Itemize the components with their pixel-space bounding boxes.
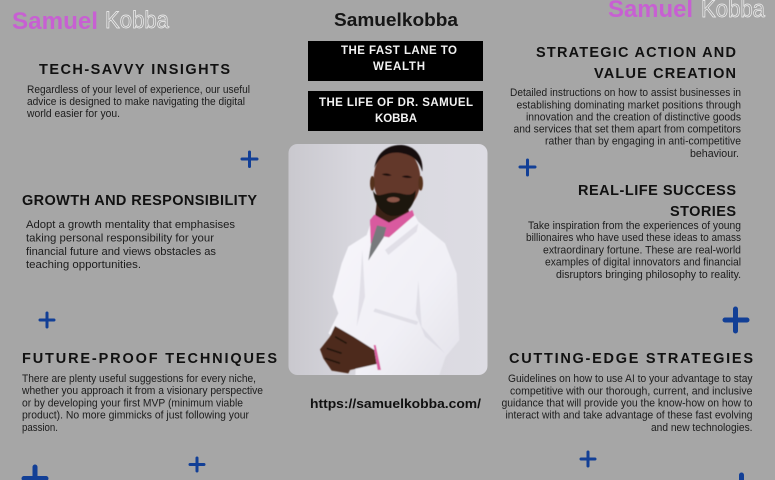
logo: top left [12, 7, 170, 35]
text block: tech-savvy insights [26, 84, 250, 120]
banner: the life of dr. samuel kobba: KOBBA [375, 113, 417, 125]
text block: real-life success stories: billionaires who have used these ideas to amass [526, 232, 741, 244]
panel: strategic action and value creation [510, 45, 741, 160]
logo: top left: Samuel [12, 8, 98, 35]
panel: cutting-edge strategies [502, 351, 753, 434]
panel: real-life success stories [526, 183, 741, 281]
text block: future-proof techniques: product). No more gimmicks of just following your [22, 410, 249, 422]
icon: plus [242, 152, 257, 166]
text block: real-life success stories: extraordinary fortune. These are real-world [543, 244, 741, 256]
heading: tech-savvy insights: TECH-SAVVY INSIGHTS [39, 62, 230, 78]
text block: future-proof techniques: There are plenty useful suggestions for every niche, [22, 373, 256, 385]
text block: future-proof techniques [21, 373, 263, 434]
heading: growth and responsibility: GROWTH AND RESPONSIBILITY [22, 193, 257, 209]
text block: cutting-edge strategies: competitive with our thorough, current, and inclusive [510, 386, 752, 398]
icon: plus [725, 309, 747, 331]
neck [375, 203, 410, 225]
beard [373, 190, 416, 216]
text block: real-life success stories: examples of digital innovators and financial [545, 256, 741, 268]
banner: the fast lane to wealth: THE FAST LANE TO [341, 45, 457, 57]
text block: future-proof techniques: or by developing your first MVP (minimum viable [22, 398, 243, 410]
banner: the fast lane to wealth [308, 41, 483, 81]
hands [320, 326, 377, 373]
text block: cutting-edge strategies: Guidelines on how to use AI to your advantage to stay [508, 373, 753, 385]
eyes [382, 173, 412, 178]
portrait photo [288, 144, 488, 380]
text block: growth and responsibility: teaching opportunities. [26, 259, 141, 271]
heading: real-life success stories: STORIES [670, 204, 736, 220]
head [373, 152, 421, 202]
text block: growth and responsibility: Adopt a growth mentality that emphasises [26, 219, 235, 231]
text block: cutting-edge strategies [502, 373, 753, 434]
tie [368, 225, 386, 261]
text block: tech-savvy insights: world easier for you. [26, 108, 120, 120]
icon: plus [190, 458, 204, 471]
text block: tech-savvy insights: Regardless of your level of experience, our useful [27, 84, 250, 96]
icon: plus [731, 475, 752, 480]
heading: strategic action and value creation [536, 45, 736, 82]
logo: top left: Kobba [105, 7, 170, 34]
heading: cutting-edge strategies: CUTTING-EDGE STRATEGIES [509, 351, 753, 367]
text block: real-life success stories: Take inspiration from the experiences of young [528, 220, 741, 232]
panel: growth and responsibility [22, 193, 257, 271]
text block: cutting-edge strategies: and new technologies. [651, 422, 752, 434]
text block: real-life success stories [526, 220, 741, 281]
banner: the life of dr. samuel kobba: THE LIFE OF DR. SAMUEL [319, 97, 473, 109]
heading: real-life success stories [578, 183, 736, 220]
icon: plus [24, 467, 46, 480]
url: https://samuelkobba.com/ [310, 396, 481, 411]
text block: strategic action and value creation: behaviour. [690, 148, 739, 160]
icon: plus [520, 160, 535, 175]
panel: future-proof techniques [21, 351, 277, 434]
icon: plus [581, 452, 595, 466]
coat [328, 213, 459, 380]
text block: tech-savvy insights: advice is designed to make navigating the digital [27, 96, 245, 108]
panel: tech-savvy insights [26, 62, 250, 120]
logo: top right [608, 0, 766, 23]
cuff [374, 345, 381, 370]
banner: the fast lane to wealth: WEALTH [373, 61, 425, 73]
text block: growth and responsibility [26, 219, 235, 271]
text block: strategic action and value creation: establishing dominating market positions through [516, 100, 741, 112]
text block: future-proof techniques: whether you approach it from a visionary perspective [21, 385, 263, 397]
banner: the life of dr. samuel kobba [308, 91, 483, 131]
text block: future-proof techniques: passion. [22, 422, 58, 434]
text block: cutting-edge strategies: guidance that will provide you the know-how on how to [502, 398, 752, 410]
heading: future-proof techniques: FUTURE-PROOF TECHNIQUES [22, 351, 277, 367]
icon: plus [40, 313, 54, 327]
heading: strategic action and value creation: VALUE CREATION [594, 66, 736, 82]
text block: growth and responsibility: taking personal responsibility for your [26, 232, 214, 244]
text block: cutting-edge strategies: interact with and take advantage of these fast evolving [506, 410, 752, 422]
text block: strategic action and value creation: and services that set them apart from competitors [514, 124, 741, 136]
text block: strategic action and value creation [510, 87, 741, 160]
heading: real-life success stories: REAL-LIFE SUCCESS [578, 183, 736, 199]
text block: strategic action and value creation: rather than by engaging in anti-competitive [545, 136, 741, 148]
hair [374, 145, 422, 172]
text block: strategic action and value creation: Detailed instructions on how to assist businesses in [510, 87, 741, 99]
title: Samuelkobba [334, 9, 459, 30]
text block: growth and responsibility: financial future and views obstacles as [26, 246, 217, 258]
shirt collar [370, 210, 414, 244]
heading: strategic action and value creation: STRATEGIC ACTION AND [536, 45, 736, 61]
text block: real-life success stories: disruptors bringing philosophy to reality. [556, 269, 741, 281]
text block: strategic action and value creation: innovation and the creation of distinctive goods [526, 112, 741, 124]
